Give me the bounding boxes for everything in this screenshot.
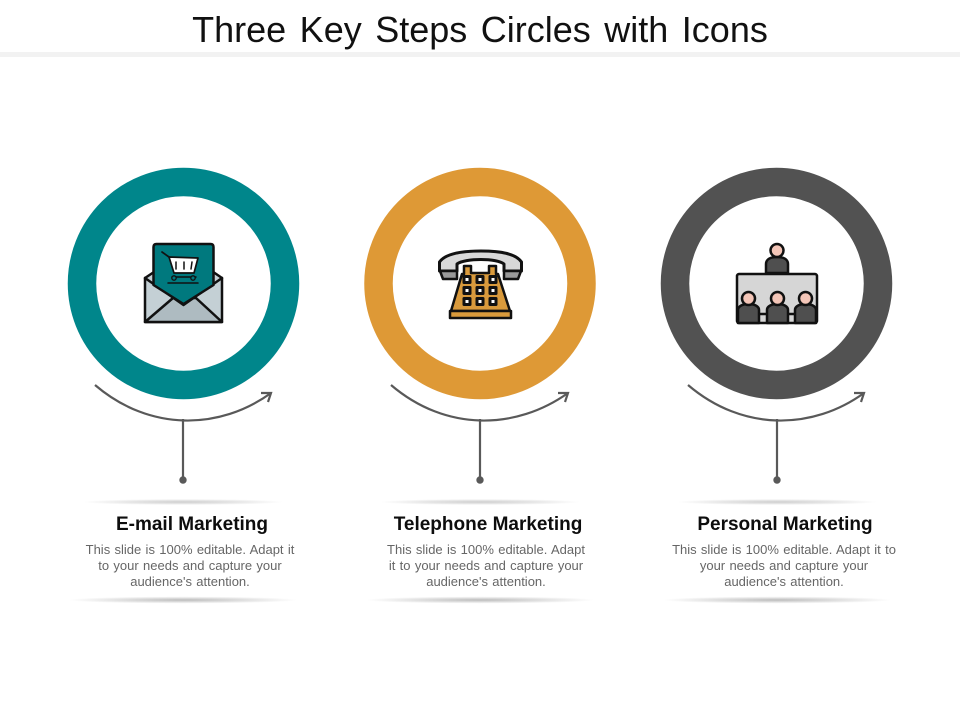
text: step 2: it to your needs and capture your (389, 558, 583, 573)
icon: telephone (440, 251, 522, 318)
icon: meeting people (737, 244, 817, 323)
title: Three Key Steps Circles with Icons (192, 9, 768, 50)
text: step 3: your needs and capture your (700, 558, 868, 573)
text: step 1 (86, 542, 294, 589)
text: step 3 (672, 542, 896, 589)
text: step 1: to your needs and capture your (98, 558, 282, 573)
icon: envelope with cart (145, 244, 222, 322)
text shadows: step 2 (366, 499, 594, 604)
ring: teal (82, 182, 285, 385)
arrow and pointer: step 1 (95, 385, 271, 484)
text: step 3: This slide is 100% editable. Adapt it to (672, 542, 896, 557)
ring: dark grey (675, 182, 878, 385)
text shadows: step 1 (69, 499, 297, 604)
arrow and pointer: step 3 (688, 385, 864, 484)
text shadows: step 3 (663, 499, 891, 604)
text: step 2: audience's attention. (426, 574, 546, 589)
text: step 2: This slide is 100% editable. Adapt (387, 542, 585, 557)
heading: step 2: Telephone Marketing (394, 514, 582, 535)
text: step 1: audience's attention. (130, 574, 250, 589)
heading: step 3: Personal Marketing (697, 514, 873, 535)
ring: orange (378, 182, 582, 385)
title rule (0, 52, 960, 57)
text: step 1: This slide is 100% editable. Adapt it (86, 542, 294, 557)
arrow and pointer: step 2 (391, 385, 568, 484)
text: step 2 (387, 542, 585, 589)
text: step 3: audience's attention. (724, 574, 844, 589)
heading: step 1: E-mail Marketing (116, 514, 268, 535)
